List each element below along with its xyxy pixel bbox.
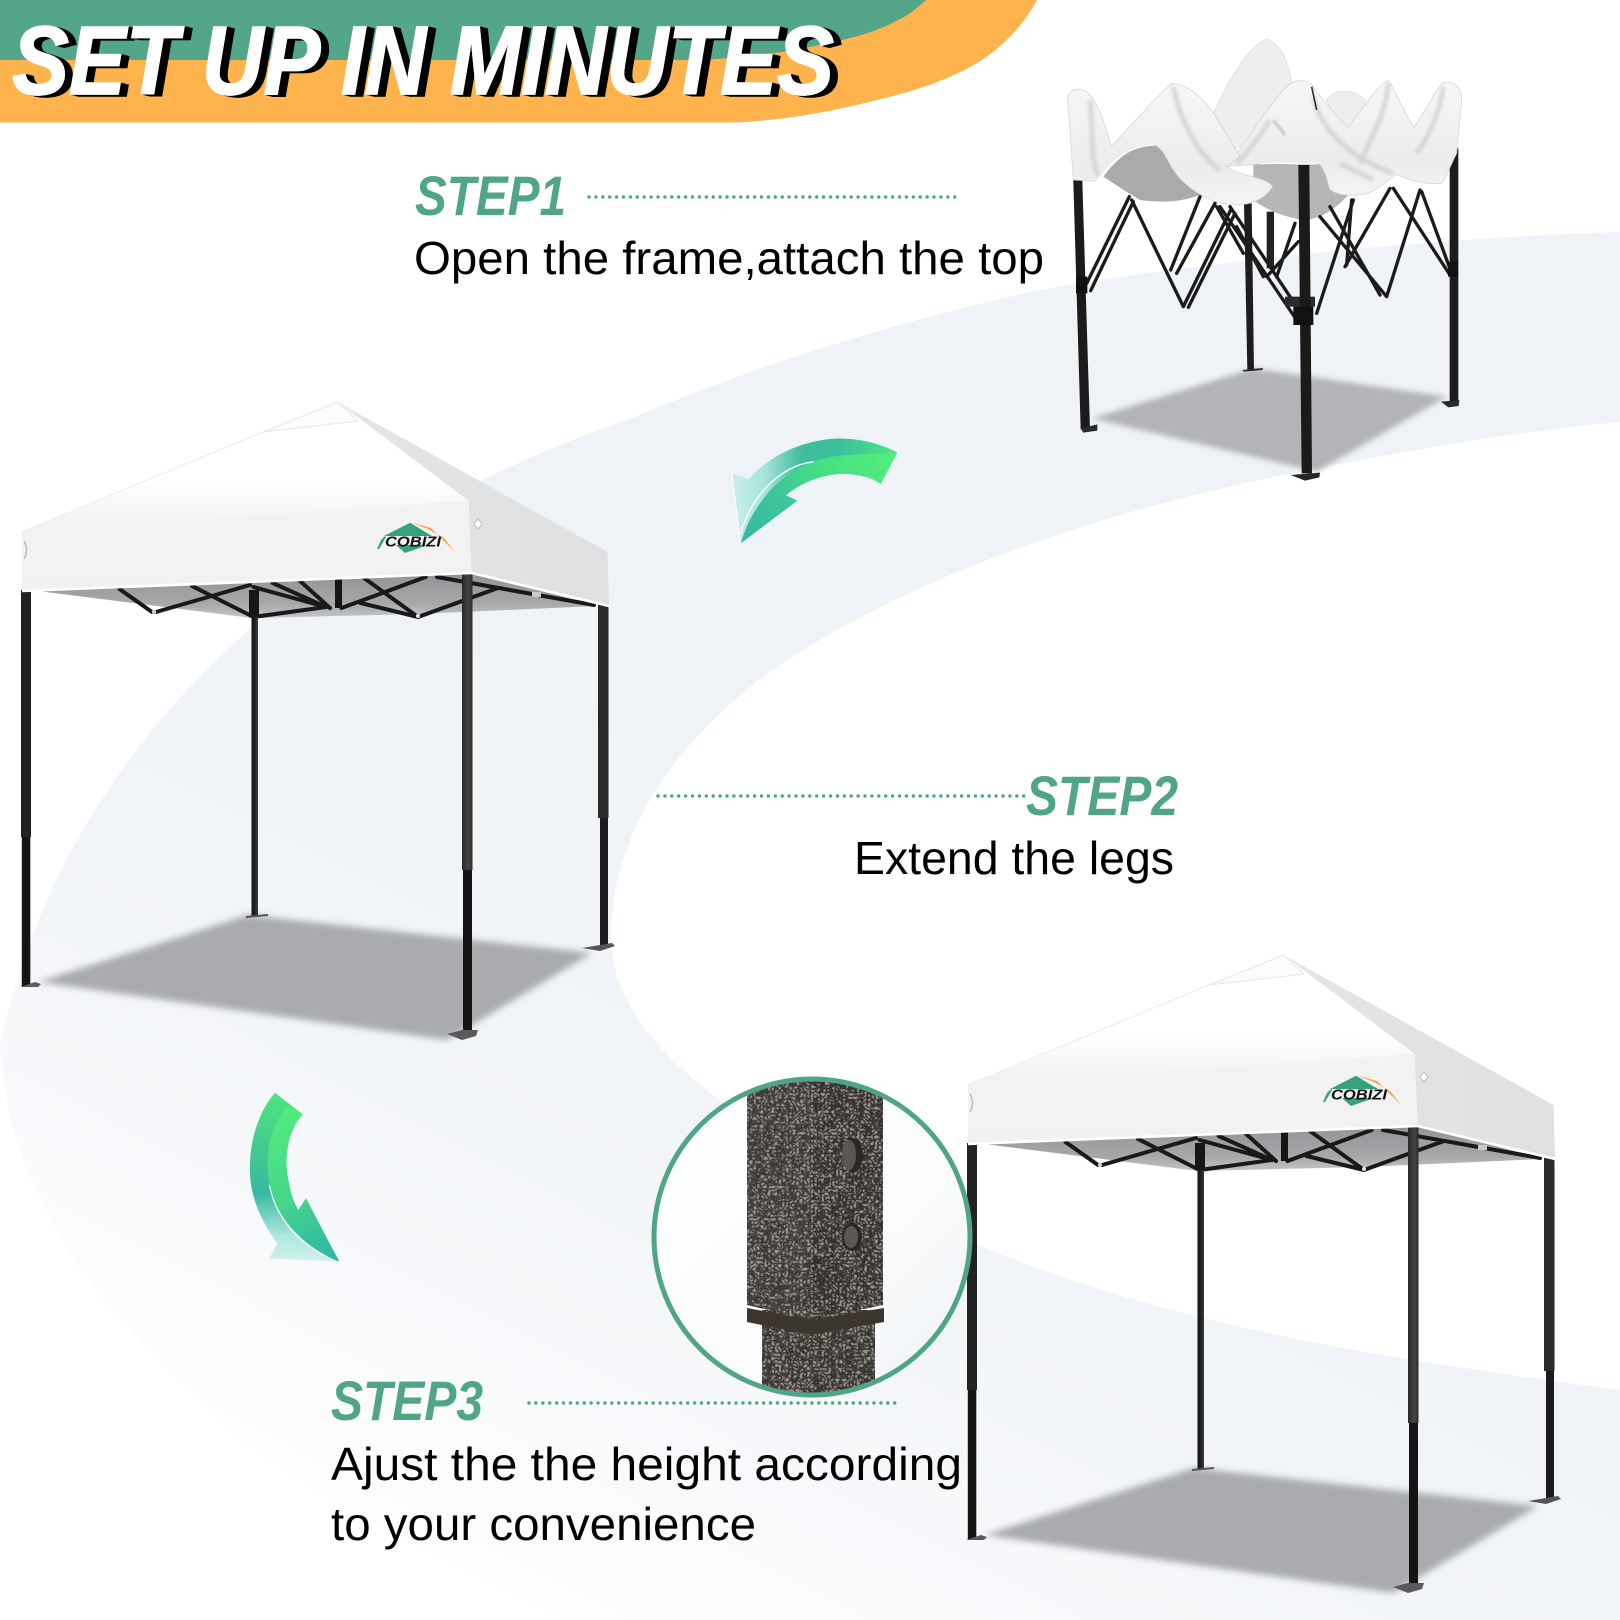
step 3 dotted leader (529, 1401, 899, 1405)
step 3 description: to your convenience (331, 1498, 756, 1550)
back legs (1244, 203, 1254, 370)
lower leg section (762, 1310, 875, 1392)
upper leg section (747, 1070, 812, 1320)
tent: fully raised canopy (step 2) (20, 402, 615, 1040)
brand logo (377, 522, 455, 553)
fabric: right and front panels (1227, 80, 1462, 195)
tent: height adjusted canopy (step 3) (966, 955, 1561, 1593)
step 1 text block (414, 164, 1044, 284)
step 2 heading: STEP2 (1026, 764, 1178, 827)
callout: leg height adjuster close-up (654, 1070, 970, 1410)
locking pin (842, 1223, 862, 1251)
step 3 text block (331, 1369, 962, 1550)
adjustment hole (848, 1138, 863, 1172)
header banner (0, 0, 1037, 122)
right leg (1450, 148, 1458, 403)
fabric: left panels (1067, 83, 1273, 205)
title: SET UP IN MINUTES (12, 6, 834, 115)
fabric folds (1090, 83, 1443, 180)
step 1 dotted leader (589, 195, 960, 199)
step 1 heading: STEP1 (415, 164, 566, 227)
back fabric (1213, 39, 1293, 153)
tent: half-open frame (step 1) (1067, 39, 1462, 481)
brand logo: COBIZI (385, 534, 442, 550)
ground shadow (1092, 368, 1447, 472)
left leg (1073, 160, 1090, 429)
step 2 dotted leader (658, 794, 1025, 798)
arrow: step 1 to step 2 (732, 438, 897, 543)
brand logo (1323, 1076, 1401, 1106)
folding truss (1087, 188, 1452, 320)
arrow: step 2 to step 3 (250, 1093, 339, 1262)
step 1 description: Open the frame,attach the top (414, 232, 1044, 284)
grey underside of fabric (1103, 145, 1203, 202)
front leg (1298, 165, 1312, 473)
green banner shape (0, 0, 926, 60)
brand logo: COBIZI (1331, 1088, 1388, 1104)
step 3 description (331, 1438, 962, 1550)
step 3 description: Ajust the the height according (331, 1438, 962, 1490)
step 2 text block (658, 764, 1178, 884)
step 2 description: Extend the legs (854, 832, 1174, 884)
orange banner shape (0, 0, 1037, 122)
callout ring (654, 1079, 970, 1395)
step 3 heading: STEP3 (331, 1369, 483, 1432)
